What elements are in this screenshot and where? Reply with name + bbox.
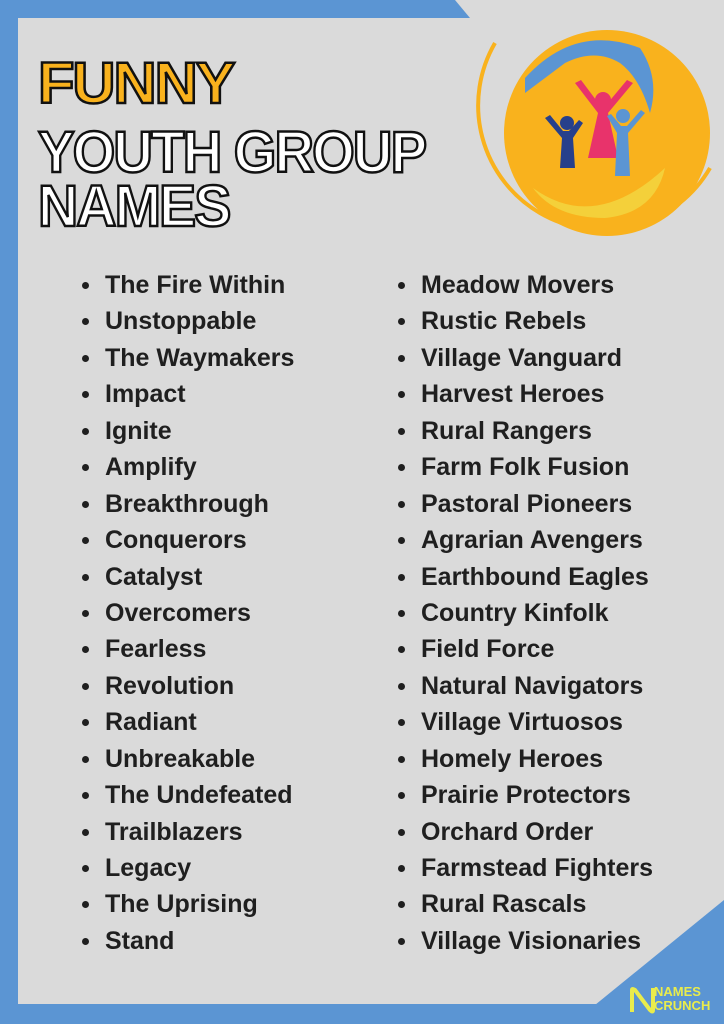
list: left column: Legacy [105,854,191,882]
list: right column: Farmstead Fighters [421,854,653,882]
list: left column: Fearless [105,635,206,663]
list: right column: Orchard Order [421,818,593,846]
list: left column: The Fire Within [105,271,285,299]
brand logo [630,984,710,1014]
list: right column: Village Virtuosos [421,708,623,736]
list: right column: Agrarian Avengers [421,526,643,554]
list: right column: Rural Rangers [421,417,592,445]
list: right column: Country Kinfolk [421,599,608,627]
list: left column: Ignite [105,417,172,445]
list: left column: Unstoppable [105,307,256,335]
list: right column: Natural Navigators [421,672,643,700]
list: right column: Harvest Heroes [421,380,604,408]
list: left column: Amplify [105,453,197,481]
list: right column: Field Force [421,635,554,663]
title [36,51,426,239]
title: YOUTH GROUP [38,120,425,185]
brand logo: CRUNCH [654,998,710,1013]
list: right column [398,271,653,955]
list: left column: The Uprising [105,890,258,918]
list: left column: Unbreakable [105,745,255,773]
list: left column: Revolution [105,672,234,700]
brand logo: NAMES [654,984,701,999]
title: NAMES [38,174,229,239]
list: right column: Farm Folk Fusion [421,453,629,481]
list: left column: The Undefeated [105,781,293,809]
list: right column: Village Vanguard [421,344,622,372]
list: right column: Rural Rascals [421,890,586,918]
list: right column: Rustic Rebels [421,307,586,335]
icon: youth group logo [476,30,712,236]
title: FUNNY [38,51,233,116]
list: left column: Catalyst [105,562,202,590]
list: left column: Breakthrough [105,490,269,518]
list: right column: Pastoral Pioneers [421,490,632,518]
list: left column [82,271,294,955]
list: right column: Earthbound Eagles [421,562,649,590]
list: right column: Meadow Movers [421,271,614,299]
list: right column: Village Visionaries [421,927,641,955]
list: left column: Conquerors [105,526,247,554]
list: left column: Overcomers [105,599,251,627]
list: right column: Homely Heroes [421,745,603,773]
list: left column: Stand [105,927,174,955]
list: left column: Impact [105,380,186,408]
list: right column: Prairie Protectors [421,781,631,809]
list: left column: Trailblazers [105,818,243,846]
list: left column: Radiant [105,708,197,736]
list: left column: The Waymakers [105,344,294,372]
